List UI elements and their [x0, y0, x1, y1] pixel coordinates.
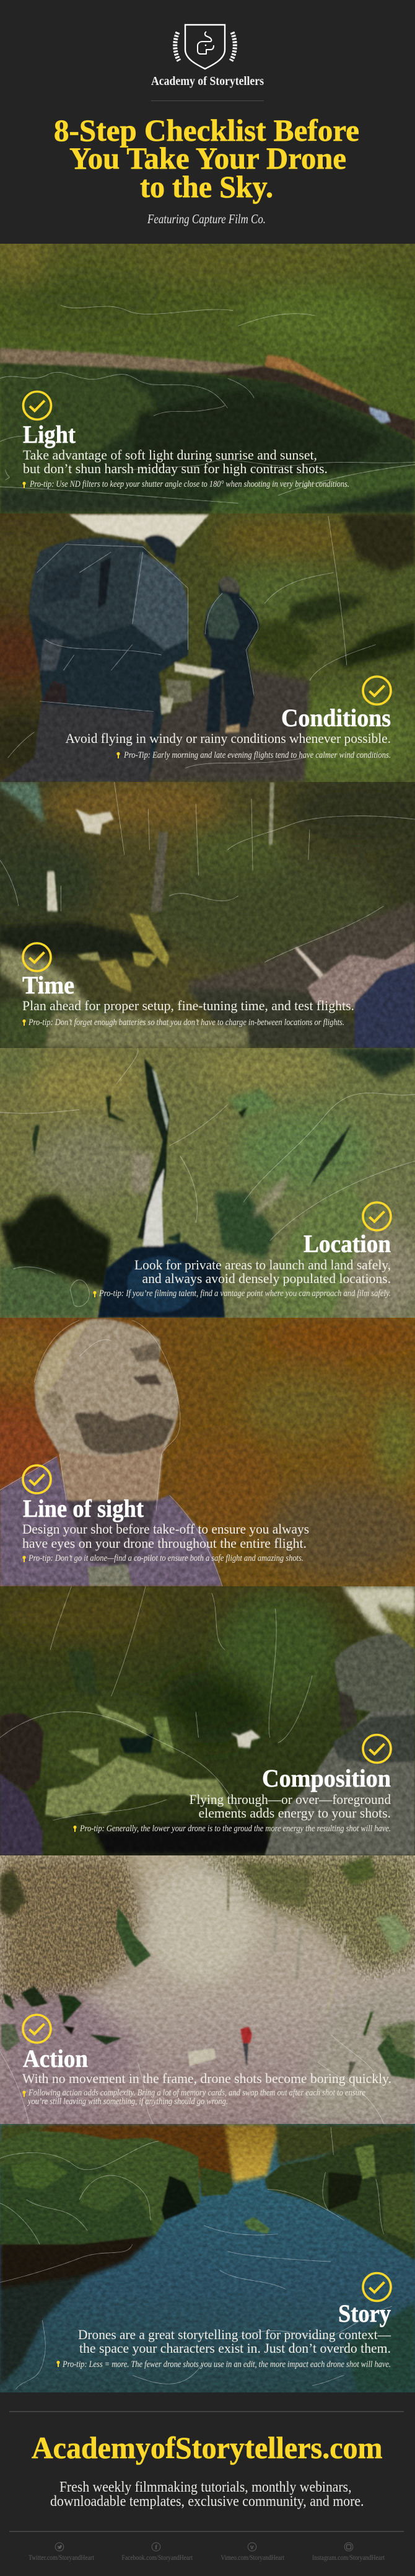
body text: elements adds energy to your shots.	[198, 1805, 391, 1821]
check icon	[23, 943, 51, 971]
check icon	[24, 392, 51, 419]
panel: action	[0, 1855, 415, 2124]
body text: Take advantage of soft light during sunrise and sunset,	[23, 447, 317, 463]
panel: location	[0, 1048, 415, 1320]
social: instagram	[312, 2543, 385, 2562]
footer description: Fresh weekly filmmaking tutorials, monthly webinars,	[59, 2479, 352, 2495]
social: vimeo	[221, 2543, 285, 2562]
panel: composition	[0, 1586, 415, 1855]
pro-tip: Pro-tip: Use ND filters to keep your shutter angle close to 180° when shooting in very bright conditions.	[29, 479, 349, 489]
panel: conditions	[0, 513, 415, 783]
pro-tip: you’re still leaving with something, if anything should go wrong.	[27, 2097, 228, 2107]
heading: Conditions	[281, 704, 391, 732]
title	[54, 113, 359, 204]
social: facebook	[121, 2543, 193, 2562]
heading: Composition	[262, 1764, 391, 1792]
body text: Plan ahead for proper setup, fine-tuning time, and test flights.	[22, 998, 354, 1013]
panel: light	[0, 228, 415, 513]
body text	[190, 1792, 391, 1821]
body text: With no movement in the frame, drone shots become boring quickly.	[22, 2071, 391, 2086]
heading: Line of sight	[23, 1495, 144, 1522]
social: facebook: f	[155, 2544, 157, 2551]
heading: Action	[23, 2045, 88, 2072]
footer	[9, 2411, 404, 2562]
title: to the Sky.	[140, 169, 273, 204]
body text	[78, 2327, 391, 2356]
body text: the space your characters exist in. Just don’t overdo them.	[79, 2340, 391, 2356]
heading: Location	[304, 1230, 391, 1258]
title: 8-Step Checklist Before	[54, 113, 359, 148]
body text	[23, 447, 328, 476]
heading: Story	[338, 2299, 391, 2327]
social: vimeo: v	[250, 2544, 254, 2551]
check icon	[23, 2015, 51, 2043]
check icon	[23, 1465, 51, 1493]
check icon	[363, 1735, 391, 1762]
body text	[134, 1257, 391, 1286]
social: vimeo: Vimeo.com/StoryandHeart	[221, 2553, 285, 2562]
header	[54, 25, 359, 226]
panel: story	[0, 2124, 415, 2392]
heading: Time	[22, 971, 74, 999]
panel: time	[0, 778, 415, 1048]
pro-tip: Pro-tip: Don’t forget enough batteries so that you don’t have to charge in-between locations or flights.	[28, 1018, 344, 1028]
footer description: downloadable templates, exclusive community, and more.	[50, 2494, 364, 2510]
footer description	[50, 2479, 364, 2510]
body text: Avoid flying in windy or rainy conditions whenever possible.	[66, 731, 391, 746]
title: You Take Your Drone	[69, 141, 346, 175]
body text	[22, 1521, 309, 1551]
brand name: Academy of Storytellers	[151, 74, 264, 88]
panel: line of sight	[0, 1315, 415, 1586]
heading: Light	[23, 420, 76, 448]
website address: AcademyofStorytellers.com	[32, 2430, 383, 2465]
social: facebook: Facebook.com/StoryandHeart	[121, 2553, 193, 2562]
body text: but don’t shun harsh midday sun for high contrast shots.	[23, 461, 328, 476]
body text: Flying through—or over—foreground	[190, 1792, 391, 1807]
body text: Look for private areas to launch and land safely,	[134, 1257, 391, 1272]
check icon	[363, 677, 391, 704]
body text: have eyes on your drone throughout the entire flight.	[22, 1535, 307, 1551]
check icon	[363, 2273, 391, 2301]
body text: and always avoid densely populated locations.	[142, 1271, 391, 1286]
social: instagram: Instagram.com/StoryandHeart	[312, 2553, 385, 2562]
logo: shield with laurels	[175, 25, 235, 69]
body text: Design your shot before take-off to ensure you always	[22, 1521, 309, 1537]
pro-tip	[22, 2088, 365, 2107]
pro-tip: Following action adds complexity. Bring a lot of memory cards, and swap them out after each shot to ensure	[28, 2088, 365, 2098]
social: twitter	[28, 2543, 95, 2562]
social: twitter: Twitter.com/StoryandHeart	[28, 2553, 95, 2562]
body text: Drones are a great storytelling tool for providing context—	[78, 2327, 391, 2342]
pro-tip: Pro-tip: Don’t go it alone—find a co-pilot to ensure both a safe flight and amazing shots.	[28, 1553, 304, 1563]
subtitle: Featuring Capture Film Co.	[147, 211, 266, 226]
check icon	[363, 1202, 391, 1230]
